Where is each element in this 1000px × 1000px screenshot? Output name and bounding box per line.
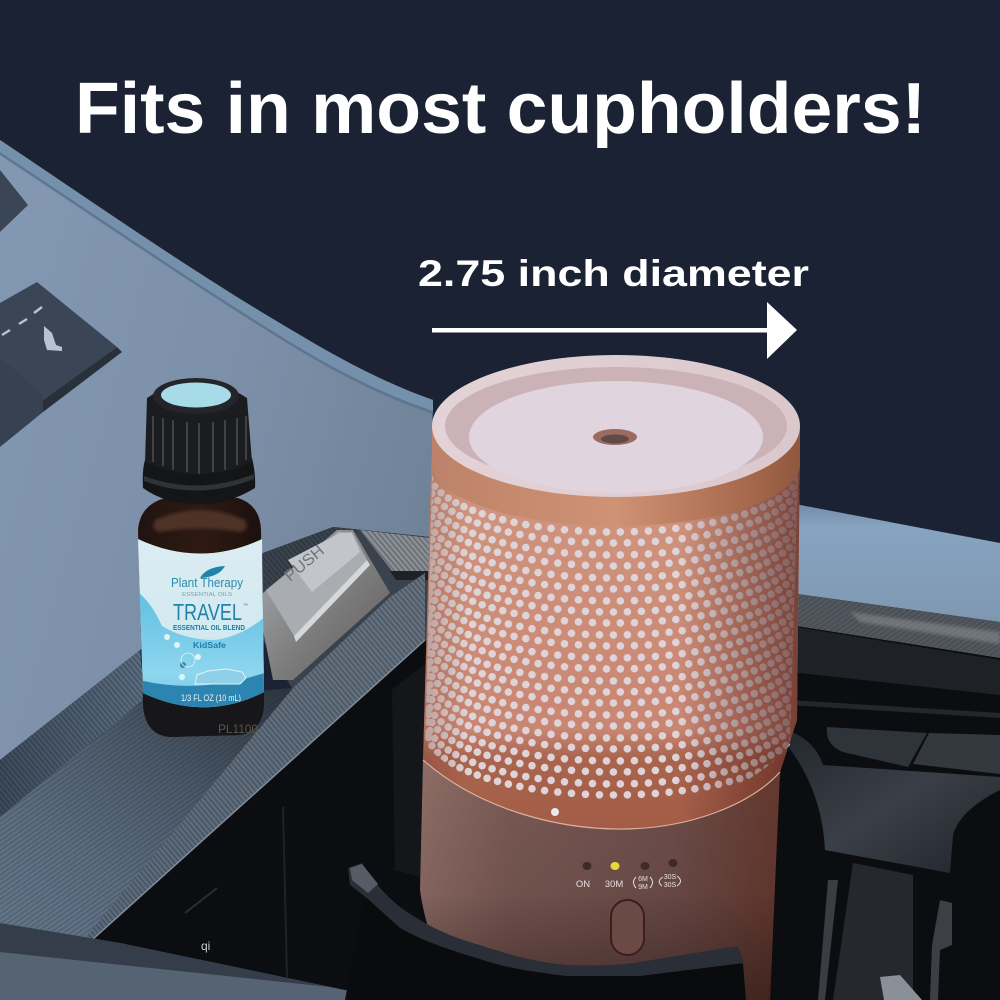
- upper console panel: [0, 140, 433, 760]
- essential oil bottle: [135, 378, 270, 737]
- upper copper band: [432, 425, 800, 526]
- side shading: [423, 440, 800, 829]
- bottle label: 1/3 FL OZ (10 mL): [181, 693, 241, 703]
- divider line: [283, 807, 287, 977]
- control labels: 9M: [638, 884, 648, 891]
- seat heater key: [0, 282, 117, 400]
- dark strip behind push button: [263, 527, 430, 690]
- sparkle bubbles: [180, 662, 186, 668]
- button cap: [266, 532, 367, 636]
- control body: [787, 730, 1000, 873]
- control labels: 30S: [664, 874, 677, 881]
- cupholder dark cavity: [90, 640, 440, 1000]
- bottle label: KidSafe: [193, 641, 227, 650]
- mist hole: [593, 429, 637, 445]
- LED row: [582, 859, 678, 870]
- dimension label: 2.75 inch diameter: [418, 253, 809, 294]
- control labels: [576, 874, 680, 891]
- seat icon: [44, 326, 62, 351]
- bottom left console corner: [0, 923, 393, 1000]
- diffuser: [420, 355, 800, 1000]
- slot panel: [833, 863, 913, 1000]
- lot code: PL1100: [218, 722, 258, 736]
- carbon face under panel: [0, 650, 145, 817]
- headline: Fits in most cupholders!: [75, 69, 926, 149]
- bottle label: ™: [243, 603, 248, 609]
- level dashes: [2, 307, 42, 335]
- control labels: 6M: [638, 876, 648, 883]
- power button: [611, 900, 644, 955]
- arm tip clip: [350, 864, 378, 893]
- right console trim: [770, 503, 1000, 1000]
- silver clip: [880, 975, 922, 1000]
- lid inner disc: [469, 381, 763, 493]
- label text: Plant Therapy: [171, 575, 243, 590]
- seat button left: [827, 727, 927, 767]
- bottle cap: [145, 382, 252, 474]
- PUSH button: PUSH: [282, 542, 328, 585]
- vertical bars: [818, 880, 838, 1000]
- mesh holes: [428, 470, 800, 795]
- bottle label: ESSENTIAL OIL BLEND: [173, 625, 245, 632]
- cap ridges: [153, 416, 246, 474]
- bottle base: [143, 690, 264, 737]
- seam line: [423, 760, 780, 829]
- bottle label: [138, 539, 264, 708]
- bottle label: ESSENTIAL OILS: [182, 592, 232, 598]
- slot line: [185, 888, 217, 913]
- leaf logo: [200, 566, 225, 578]
- carbon ridge: [85, 573, 425, 940]
- PUSH button: [263, 530, 390, 680]
- qi mark: qi: [201, 939, 210, 953]
- control labels: 30S: [664, 882, 677, 889]
- bottle collar: [143, 458, 255, 504]
- diffuser lid rim: [432, 355, 800, 497]
- dashboard buttons: [0, 170, 122, 447]
- bottle label: TRAVEL: [173, 599, 242, 625]
- diffuser base: [420, 760, 780, 1000]
- control labels: 30M: [605, 879, 623, 890]
- control labels: ON: [576, 879, 590, 890]
- lower right car controls: [787, 727, 1000, 1000]
- indicator dot: [551, 808, 559, 816]
- bottle shoulder highlight: [153, 510, 247, 532]
- bottle glass: [138, 498, 264, 737]
- cap top disc: [153, 378, 239, 414]
- cupholder arm: [348, 863, 744, 976]
- car outline icon: [195, 669, 246, 684]
- lower key: [0, 357, 43, 447]
- perforated mesh with lower copper band: [423, 440, 800, 829]
- seat button right: [913, 733, 1000, 774]
- dimension arrow: [432, 302, 797, 359]
- top key: [0, 170, 28, 232]
- carbon tray: [0, 688, 293, 938]
- lid recess ring: [445, 367, 787, 485]
- cupholder interior below arm: [345, 895, 746, 1000]
